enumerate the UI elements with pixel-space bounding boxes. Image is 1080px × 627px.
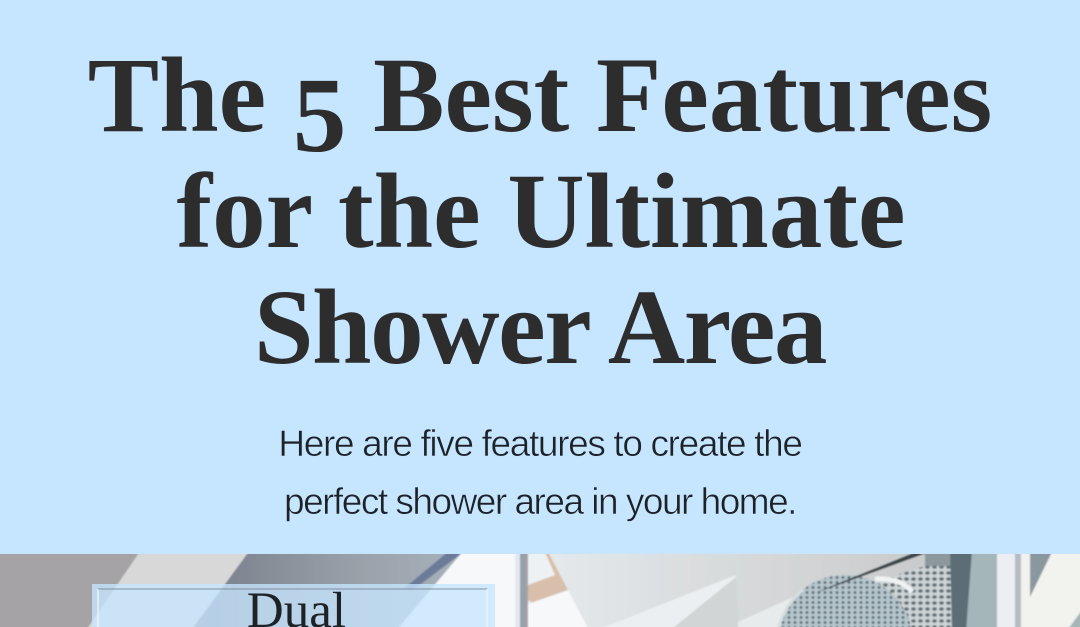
vertical post [515, 550, 526, 627]
title: for the Ultimate [177, 153, 905, 271]
title [88, 37, 992, 387]
title: Shower Area [254, 269, 826, 387]
shower head [777, 551, 932, 627]
subtitle text [278, 423, 802, 522]
right post and window [997, 550, 1080, 627]
mosaic wall [790, 550, 997, 627]
title: The 5 Best Features [88, 37, 992, 175]
subtitle text: perfect shower area in your home. [284, 481, 796, 522]
left wall and stripes [0, 550, 540, 627]
subtitle text: Here are five features to create the [278, 423, 802, 464]
right wall and ledge [528, 550, 968, 627]
panel: shower photo [0, 554, 1080, 627]
callout: Dual [92, 584, 495, 627]
